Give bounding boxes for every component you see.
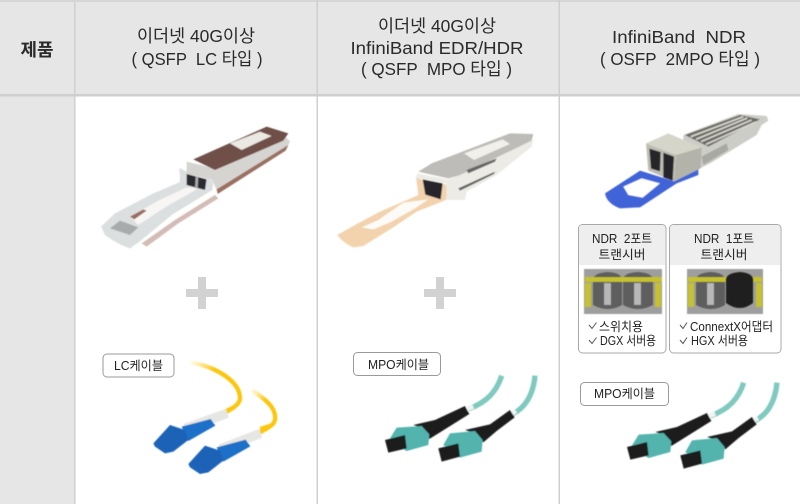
card heading [694,232,754,262]
card heading: NDR 1포트 [694,232,754,246]
feature list: 스위치용 [599,320,643,334]
card heading [592,232,652,262]
image: LC cable [153,362,275,474]
heading: OSFP 2MPO type: InfiniBand NDR [612,27,746,47]
card heading: 트랜시버 [700,248,748,262]
image: QSFP LC transceiver [101,127,290,248]
heading: OSFP 2MPO type: ( OSFP 2MPO 타입 ) [600,49,760,69]
heading: QSFP LC type: ( QSFP LC 타입 ) [132,49,262,69]
heading: OSFP 2MPO type [600,27,760,69]
image: OSFP transceiver [605,114,768,208]
label: MPO cable, column 3 [580,382,668,406]
feature list [680,320,773,348]
plus sign: column 1 [186,277,218,309]
label: LC cable: LC케이블 [114,359,163,373]
heading: QSFP MPO type [350,16,524,79]
heading: QSFP MPO type: 이더넷 40G이상 [378,16,496,36]
card: NDR 1-port transceiver [670,224,781,353]
card: NDR 2-port transceiver [578,224,666,353]
feature list: HGX 서버용 [691,334,748,348]
heading: QSFP LC type [132,26,262,69]
feature list: DGX 서버용 [600,334,656,348]
label: LC cable [103,354,174,377]
card heading: NDR 2포트 [592,232,652,246]
heading: product column: 제품 [20,40,54,60]
image: MPO cable, column 3 [627,383,777,469]
heading: QSFP MPO type: InfiniBand EDR/HDR [350,38,524,58]
label: MPO cable, column 3: MPO케이블 [594,387,655,401]
label: MPO cable, column 2: MPO케이블 [368,358,429,372]
feature list [589,320,656,348]
feature list: ConnextX어댑터 [690,320,773,334]
port diagram: one port populated [687,269,763,314]
image: QSFP MPO transceiver [337,133,533,247]
image: MPO cable, column 2 [385,376,535,462]
heading: QSFP LC type: 이더넷 40G이상 [137,26,255,46]
heading: QSFP MPO type: ( QSFP MPO 타입 ) [361,59,512,79]
plus sign: column 2 [424,277,456,309]
port diagram: two ports populated [584,269,662,314]
card heading: 트랜시버 [598,248,646,262]
label: MPO cable, column 2 [354,352,440,376]
